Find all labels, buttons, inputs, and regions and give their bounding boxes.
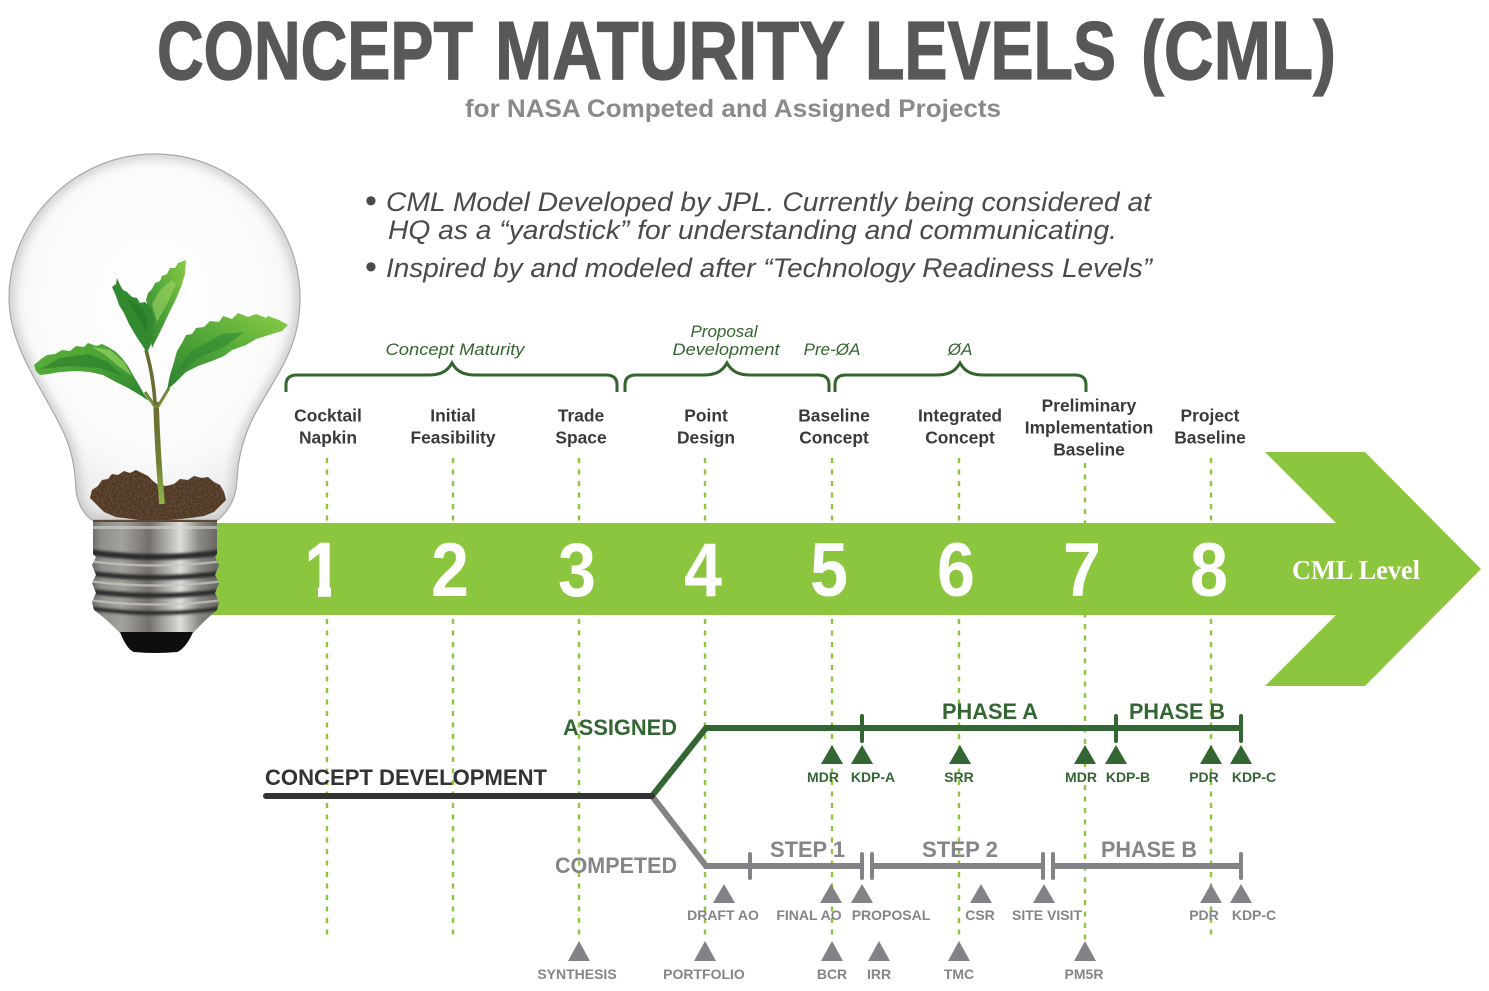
level names: Design (677, 428, 735, 448)
screw base (88, 518, 224, 653)
track headings (265, 699, 1225, 878)
subtitle: for NASA Competed and Assigned Projects (465, 95, 1001, 123)
review milestones: PM5R (1065, 966, 1103, 982)
title: CONCEPT (157, 4, 473, 97)
bullet text block: • (365, 182, 377, 220)
assigned milestones (807, 745, 1276, 785)
track headings: STEP 1 (770, 837, 845, 862)
level names: Baseline (1053, 440, 1125, 460)
bracket labels: Development (672, 340, 781, 359)
bullet text block: HQ as a “yardstick” for understanding and communicating. (388, 215, 1117, 245)
bullet text block: • (365, 248, 377, 286)
title: LEVELS (865, 4, 1116, 97)
track headings: CONCEPT DEVELOPMENT (265, 765, 548, 790)
level numbers: 7 (1063, 528, 1101, 613)
assigned milestones: SRR (944, 769, 974, 785)
concept development line (266, 793, 652, 799)
bracket labels: ØA (947, 340, 972, 359)
assigned milestones: PDR (1189, 769, 1219, 785)
review milestones: IRR (867, 966, 891, 982)
competed milestones: PDR (1189, 907, 1219, 923)
track headings: PHASE B (1129, 699, 1225, 724)
assigned milestones: KDP-B (1106, 769, 1150, 785)
level numbers: 4 (684, 528, 722, 613)
assigned milestones: MDR (1065, 769, 1097, 785)
assigned milestones: KDP-C (1232, 769, 1276, 785)
review milestones: SYNTHESIS (537, 966, 617, 982)
review milestones: PORTFOLIO (663, 966, 745, 982)
level names: Point (684, 406, 728, 426)
level names: Concept (799, 428, 869, 448)
level names: Cocktail (294, 406, 362, 426)
level names: Space (555, 428, 607, 448)
bracket: proposal development (625, 363, 829, 392)
track headings: PHASE B (1101, 837, 1197, 862)
level names: Initial (430, 406, 476, 426)
level names: Integrated (918, 406, 1002, 426)
stem (145, 350, 169, 504)
assigned track (652, 716, 1241, 796)
bullet text block (365, 182, 1153, 286)
competed milestones: KDP-C (1232, 907, 1276, 923)
level names: Trade (558, 406, 605, 426)
bracket: concept maturity (286, 363, 617, 392)
level numbers: 3 (558, 528, 596, 613)
level names: Implementation (1025, 418, 1153, 438)
level names: Baseline (798, 406, 870, 426)
level names: Concept (925, 428, 995, 448)
competed milestones: CSR (965, 907, 995, 923)
title: MATURITY (495, 4, 845, 97)
review milestones (537, 941, 1103, 982)
competed milestones: PROPOSAL (852, 907, 931, 923)
level names: Feasibility (410, 428, 496, 448)
review milestones: TMC (944, 966, 974, 982)
assigned milestones: KDP-A (851, 769, 895, 785)
bullet text block: Inspired by and modeled after “Technology Readiness Levels” (386, 253, 1153, 283)
track headings: PHASE A (942, 699, 1038, 724)
level numbers: 8 (1190, 528, 1228, 613)
bracket labels (386, 322, 972, 359)
competed milestones (687, 884, 1276, 923)
base contact (120, 632, 193, 653)
bracket: pre-phase A and phase A (835, 363, 1086, 392)
level numbers: 1 (305, 528, 341, 613)
level numbers: 6 (937, 528, 975, 613)
icon: light bulb with seedling (9, 154, 300, 653)
level names (294, 396, 1246, 460)
level names: Project (1181, 406, 1240, 426)
level names: Preliminary (1042, 396, 1137, 416)
bracket labels: Proposal (690, 322, 759, 341)
level guide lines (327, 458, 1211, 940)
competed track (652, 796, 1241, 878)
title: (CML) (1141, 4, 1336, 97)
level names: Napkin (299, 428, 357, 448)
leaf: left (34, 343, 149, 401)
bracket labels: Concept Maturity (386, 340, 526, 359)
leaf: upper left (112, 278, 154, 353)
bracket labels: Pre-ØA (804, 340, 860, 359)
level numbers (300, 528, 1228, 613)
competed milestones: FINAL AO (776, 907, 842, 923)
level numbers: 5 (810, 528, 848, 613)
competed milestones: DRAFT AO (687, 907, 759, 923)
level names: Baseline (1174, 428, 1246, 448)
leaf: right (167, 313, 288, 390)
arrow label: CML Level (1292, 555, 1420, 585)
bulb glass (9, 154, 300, 520)
CML level arrow (210, 452, 1481, 686)
track headings: ASSIGNED (563, 715, 677, 740)
soil (90, 470, 226, 520)
leaf: upper right (146, 260, 186, 348)
level numbers: 2 (431, 528, 469, 613)
review milestones: BCR (817, 966, 847, 982)
title (157, 4, 1336, 97)
track headings: STEP 2 (922, 837, 998, 862)
bullet text block: CML Model Developed by JPL. Currently being considered at (386, 187, 1153, 217)
assigned milestones: MDR (807, 769, 839, 785)
competed milestones: SITE VISIT (1012, 907, 1082, 923)
track headings: COMPETED (555, 853, 677, 878)
